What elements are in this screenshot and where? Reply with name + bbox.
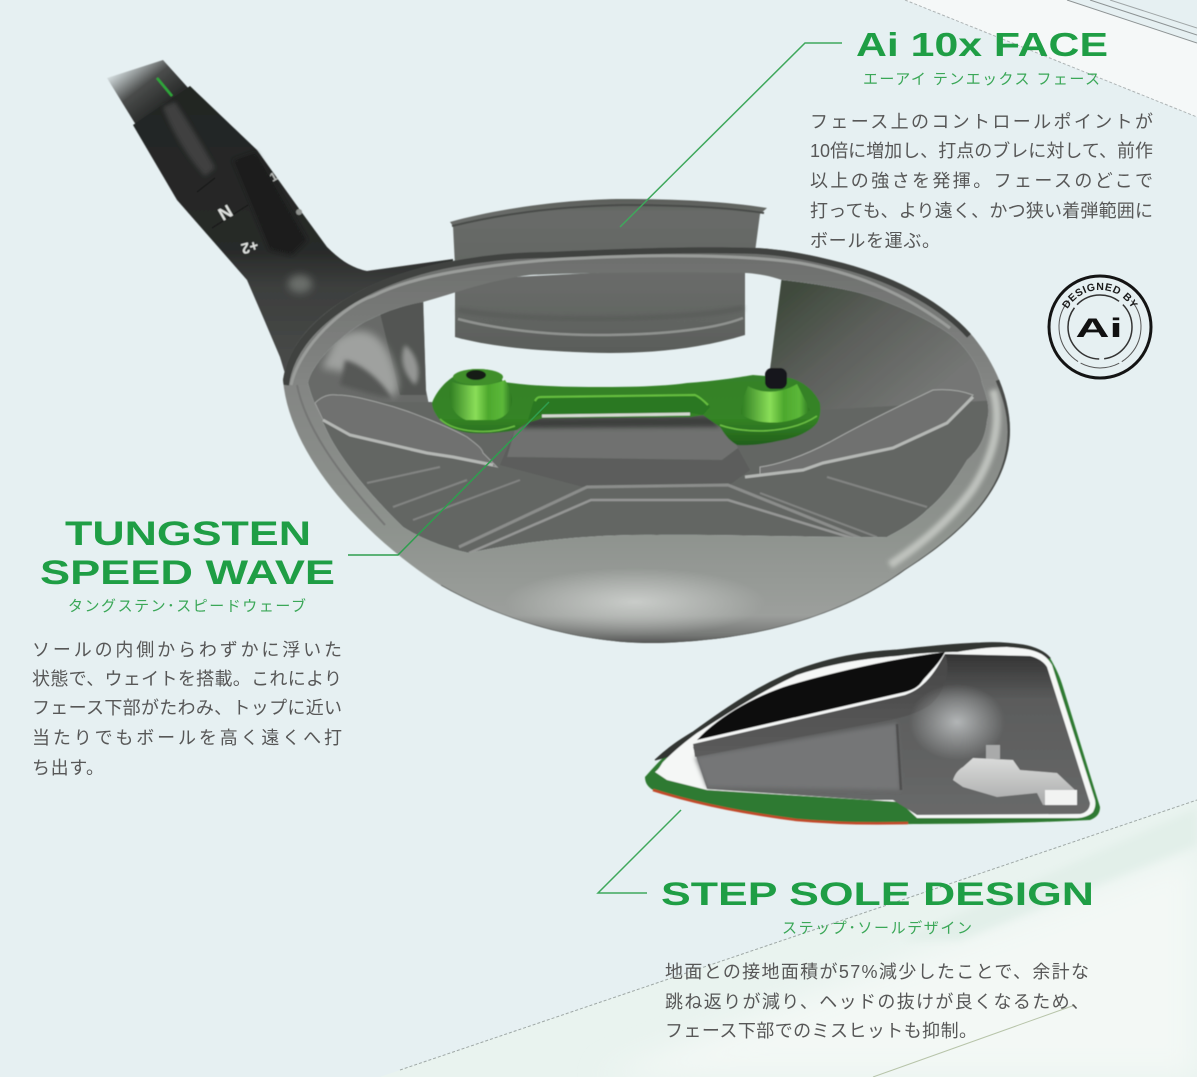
hosel bbox=[133, 86, 453, 390]
center floor bbox=[500, 416, 750, 488]
callout line: step sole design bbox=[598, 810, 681, 893]
body: 当たりでもボールを高く遠くへ打 bbox=[32, 728, 342, 748]
callout line: tungsten speed wave bbox=[348, 402, 549, 555]
right pad bbox=[745, 390, 973, 477]
body: フェース下部がたわみ、トップに近い bbox=[32, 698, 342, 718]
bottom right light band bbox=[380, 800, 1197, 1077]
body: ち出す。 bbox=[32, 758, 104, 778]
weight bar recess bbox=[528, 395, 710, 420]
tungsten speed wave weight bbox=[432, 368, 820, 445]
right wall bbox=[770, 279, 988, 411]
right weight boss bbox=[720, 368, 817, 431]
floor ribs bbox=[367, 467, 927, 553]
body: フェース上のコントロールポイントが bbox=[810, 112, 1153, 132]
head ring and sole bbox=[283, 247, 1010, 645]
heading: TUNGSTEN bbox=[65, 515, 311, 553]
white inner edge bbox=[655, 647, 1095, 818]
subtitle: タングステン･スピードウェーブ bbox=[68, 597, 306, 615]
heading: STEP SOLE DESIGN bbox=[661, 876, 1094, 912]
body bbox=[665, 962, 1089, 1041]
body: 打っても、より遠く、かつ狭い着弾範囲に bbox=[810, 201, 1153, 221]
callout line: Ai 10x face bbox=[620, 43, 842, 227]
body: 地面との接地面積が57%減少したことで、余計な bbox=[665, 962, 1089, 982]
body bbox=[32, 640, 342, 778]
left wall bbox=[307, 301, 429, 403]
body: 状態で、ウェイトを搭載。これにより bbox=[32, 669, 342, 689]
head interior bbox=[307, 279, 990, 554]
red sole stripe bbox=[653, 790, 908, 823]
face plate bbox=[450, 199, 767, 353]
dark top edge bbox=[655, 643, 1050, 760]
ledge bbox=[693, 654, 947, 757]
badge: designed by Ai: Ai bbox=[1076, 313, 1122, 343]
subtitle: ステップ･ソールデザイン bbox=[782, 919, 972, 937]
shaft bbox=[107, 60, 190, 125]
left pad bbox=[315, 395, 497, 467]
dark upper cavity bbox=[697, 652, 945, 740]
subtitle: エーアイ テンエックス フェース bbox=[863, 71, 1100, 88]
golf club head cutaway bbox=[107, 60, 1010, 645]
outer shell bbox=[645, 643, 1100, 824]
body: ボールを運ぶ。 bbox=[810, 231, 940, 251]
text block: Ai 10x Face bbox=[810, 26, 1153, 251]
body: 跳ね返りが減り、ヘッドの抜けが良くなるため、 bbox=[665, 992, 1089, 1012]
body: 以上の強さを発揮。フェースのどこで bbox=[810, 171, 1153, 191]
top right light band bbox=[905, 0, 1197, 117]
hosel label N: N bbox=[215, 201, 236, 225]
badge: designed by Ai: DESIGNED BY bbox=[1062, 282, 1138, 308]
body: ソールの内側からわずかに浮いた bbox=[32, 640, 342, 660]
text block: Step Sole Design bbox=[661, 876, 1094, 1041]
lower chamber bbox=[695, 723, 900, 790]
rib line bbox=[897, 724, 901, 790]
highlight bbox=[909, 684, 1005, 760]
body: 10倍に増加し、打点のブレに対して、前作 bbox=[810, 140, 1153, 161]
hosel label +2: +2 bbox=[239, 236, 260, 257]
body bbox=[810, 112, 1153, 251]
floor bbox=[323, 400, 988, 554]
interior bbox=[693, 654, 1090, 815]
hosel mark: 1 bbox=[267, 169, 280, 185]
weight piece bbox=[953, 745, 1077, 805]
shaft green stripe bbox=[157, 78, 172, 96]
left weight boss bbox=[440, 369, 515, 431]
text block: Tungsten Speed Wave: SPEED WAVE bbox=[40, 554, 335, 592]
body: フェース下部でのミスヒットも抑制。 bbox=[665, 1021, 977, 1041]
step sole cross section bbox=[645, 643, 1100, 824]
badge: designed by Ai bbox=[1048, 274, 1152, 380]
text block: Tungsten Speed Wave bbox=[32, 515, 342, 778]
heading: Ai 10x FACE bbox=[856, 26, 1108, 63]
